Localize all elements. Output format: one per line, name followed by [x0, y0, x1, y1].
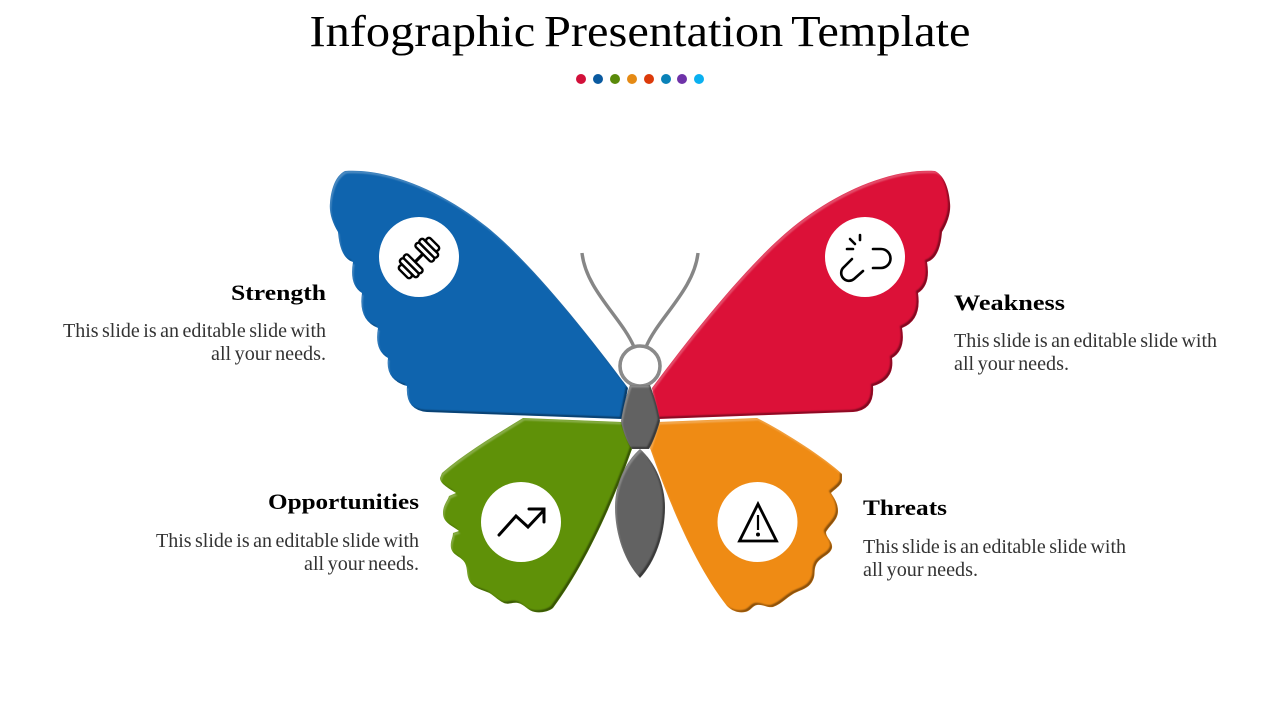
text block: opportunities — [156, 489, 419, 575]
wing: threats (orange) — [650, 418, 842, 612]
text block: strength: This slide is an editable slide with — [63, 320, 326, 342]
icon: warning triangle — [718, 482, 798, 562]
text block: weakness: all your needs. — [954, 353, 1069, 375]
text block: weakness: This slide is an editable slide with — [954, 330, 1217, 352]
text block: threats: all your needs. — [863, 559, 978, 581]
icon: trend arrow — [481, 482, 561, 562]
text block: weakness: Weakness — [954, 290, 1065, 315]
butterfly head — [620, 346, 660, 386]
text block: threats: Threats — [863, 495, 947, 520]
wing: weakness (red) — [652, 171, 950, 419]
text block: opportunities: This slide is an editable slide with — [156, 530, 419, 552]
butterfly abdomen — [615, 449, 665, 578]
text block: strength — [63, 280, 327, 365]
butterfly antennae — [582, 253, 698, 347]
text block: opportunities: all your needs. — [304, 553, 419, 575]
wing: opportunities (green) — [440, 418, 632, 612]
text block: strength: Strength — [231, 280, 327, 305]
icon: broken link — [825, 217, 905, 297]
text block: threats: This slide is an editable slide with — [863, 536, 1126, 558]
text block: weakness — [954, 290, 1217, 375]
butterfly thorax — [621, 385, 660, 449]
text block: opportunities: Opportunities — [268, 489, 419, 514]
icon: dumbbell — [379, 217, 459, 297]
text block: strength: all your needs. — [211, 343, 326, 365]
title: Infographic Presentation Template — [310, 7, 970, 56]
wing: strength (blue) — [330, 171, 628, 419]
text block: threats — [863, 495, 1126, 581]
title dots — [576, 74, 704, 84]
